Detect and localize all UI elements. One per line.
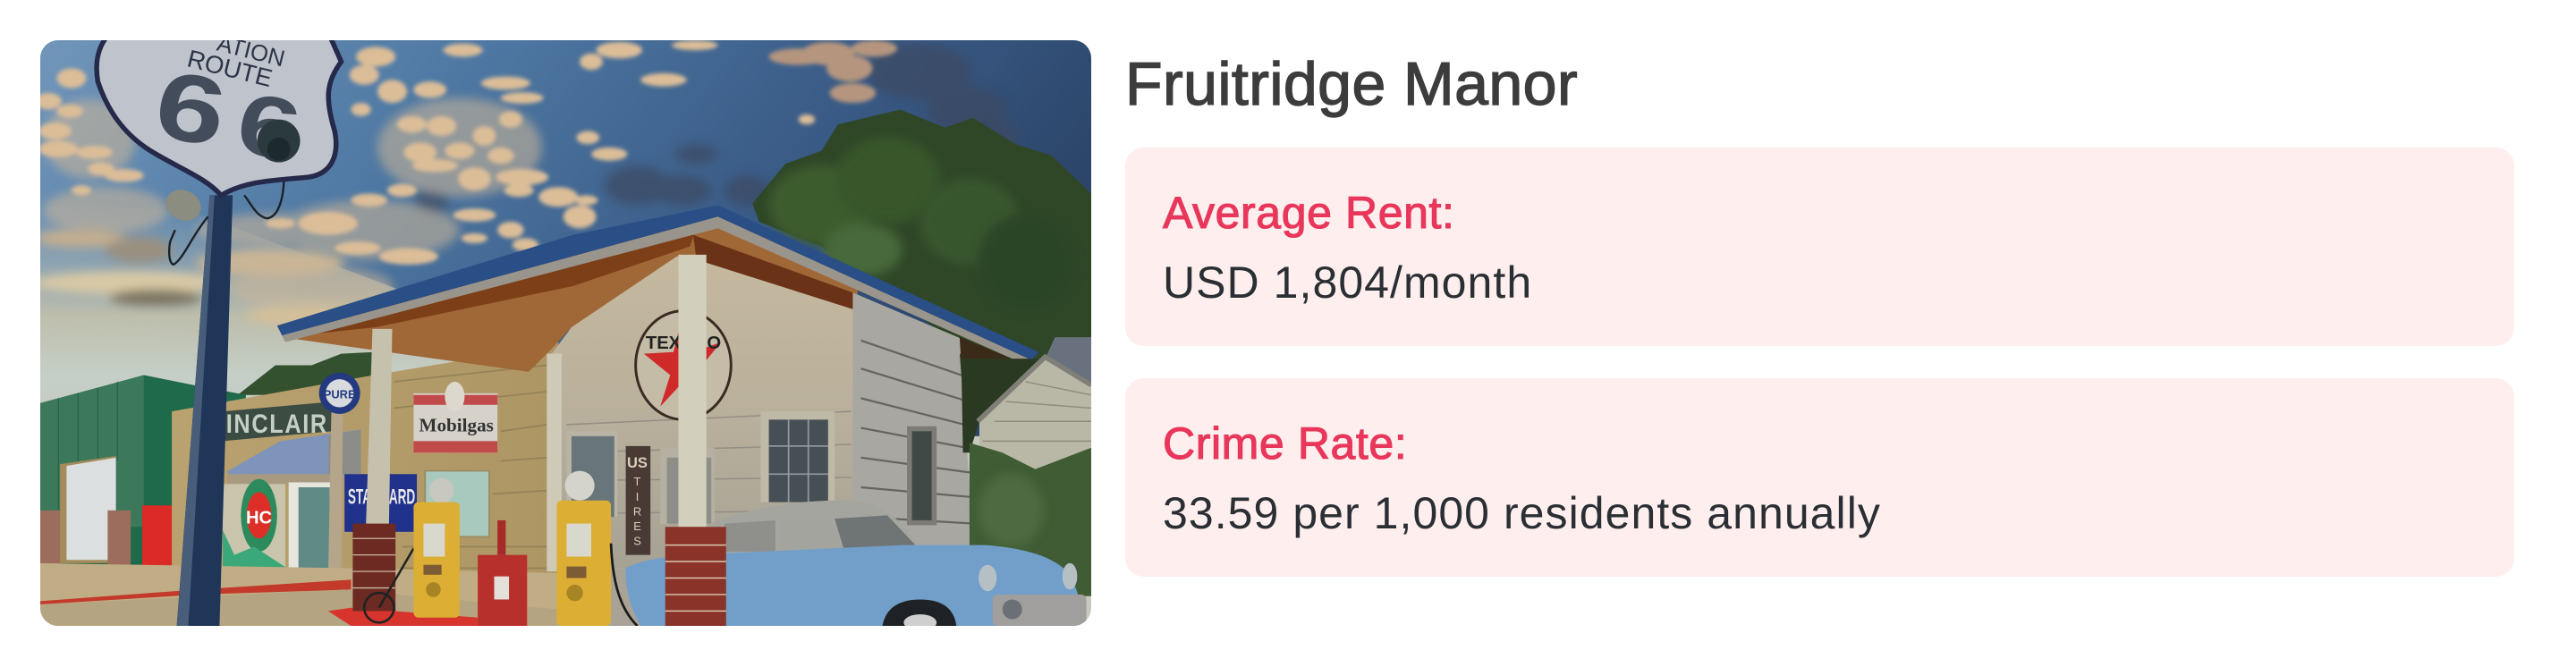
label: average rent: Average Rent: — [1163, 188, 1455, 238]
US Tires sign: T — [634, 475, 641, 488]
tree — [752, 109, 1091, 411]
neighbouring house and bushes — [962, 357, 1091, 596]
roof — [277, 206, 1038, 365]
hose wheel — [364, 548, 413, 622]
white post and brick base, left — [352, 329, 395, 611]
value: crime rate: 33.59 per 1,000 residents annually — [1163, 488, 1881, 538]
Texaco sign — [636, 311, 731, 419]
US Tires sign: US — [627, 454, 648, 471]
dark clouds — [415, 44, 1019, 215]
door — [289, 482, 331, 571]
lower sunset cloud band — [32, 228, 361, 325]
Route 66 shield sign: ROUTE — [184, 45, 275, 92]
US Tires sign: S — [633, 535, 641, 548]
car — [625, 501, 1086, 631]
red box — [478, 520, 527, 626]
Texaco sign: TEXACO — [646, 334, 721, 353]
Route 66 shield sign — [97, 31, 342, 195]
Standard sign: STANDARD — [348, 485, 415, 509]
Route 66 shield sign: 6 — [230, 74, 308, 180]
US Tires sign: R — [633, 504, 641, 518]
card: average rent — [1125, 148, 2514, 346]
clouds — [35, 40, 815, 265]
white post and brick base, right — [665, 255, 726, 626]
window — [425, 471, 489, 536]
awning — [228, 429, 361, 477]
Route 66 pole — [177, 195, 233, 626]
yellow pump 1 — [413, 478, 460, 618]
Sinclair sign: INCLAIR — [226, 409, 328, 439]
wide warm cloud haze — [44, 98, 542, 311]
Route 66 shield sign: 6 — [148, 49, 234, 167]
Mobilgas sign: Mobilgas — [419, 414, 494, 435]
photo: Route 66 vintage gas station — [40, 40, 1091, 626]
US Tires sign: I — [636, 490, 639, 503]
card: crime rate — [1125, 378, 2514, 577]
green metal building — [40, 376, 246, 568]
Mobilgas sign — [413, 382, 497, 452]
Standard sign — [344, 474, 417, 532]
HC sign — [223, 479, 285, 567]
ground — [40, 563, 657, 626]
red cooler — [142, 505, 178, 567]
Pure sign — [319, 373, 360, 414]
sky — [40, 40, 1093, 626]
brown dusk clouds — [769, 40, 897, 103]
US Tires sign: E — [633, 519, 641, 533]
grey sky patch, right edge — [1046, 337, 1091, 388]
garage door — [60, 456, 116, 563]
Pure sign: PURE — [324, 387, 356, 401]
downspout — [547, 354, 562, 571]
gas station wall — [547, 235, 1027, 571]
Pure sign pole — [328, 411, 343, 579]
heading: Fruitridge Manor — [1125, 50, 1578, 118]
cables and small lamp — [161, 167, 284, 265]
dinosaur — [223, 530, 287, 573]
US Tires sign — [626, 446, 650, 555]
wood soffit — [282, 210, 858, 372]
tan siding building — [172, 337, 558, 579]
yellow pump 2 — [556, 471, 637, 626]
Sinclair sign — [223, 401, 333, 441]
HC sign: HC — [246, 509, 273, 528]
label: crime rate: Crime Rate: — [1163, 418, 1407, 469]
value: average rent: USD 1,804/month — [1163, 258, 1532, 308]
distant trees — [238, 352, 374, 395]
windows — [566, 411, 936, 525]
